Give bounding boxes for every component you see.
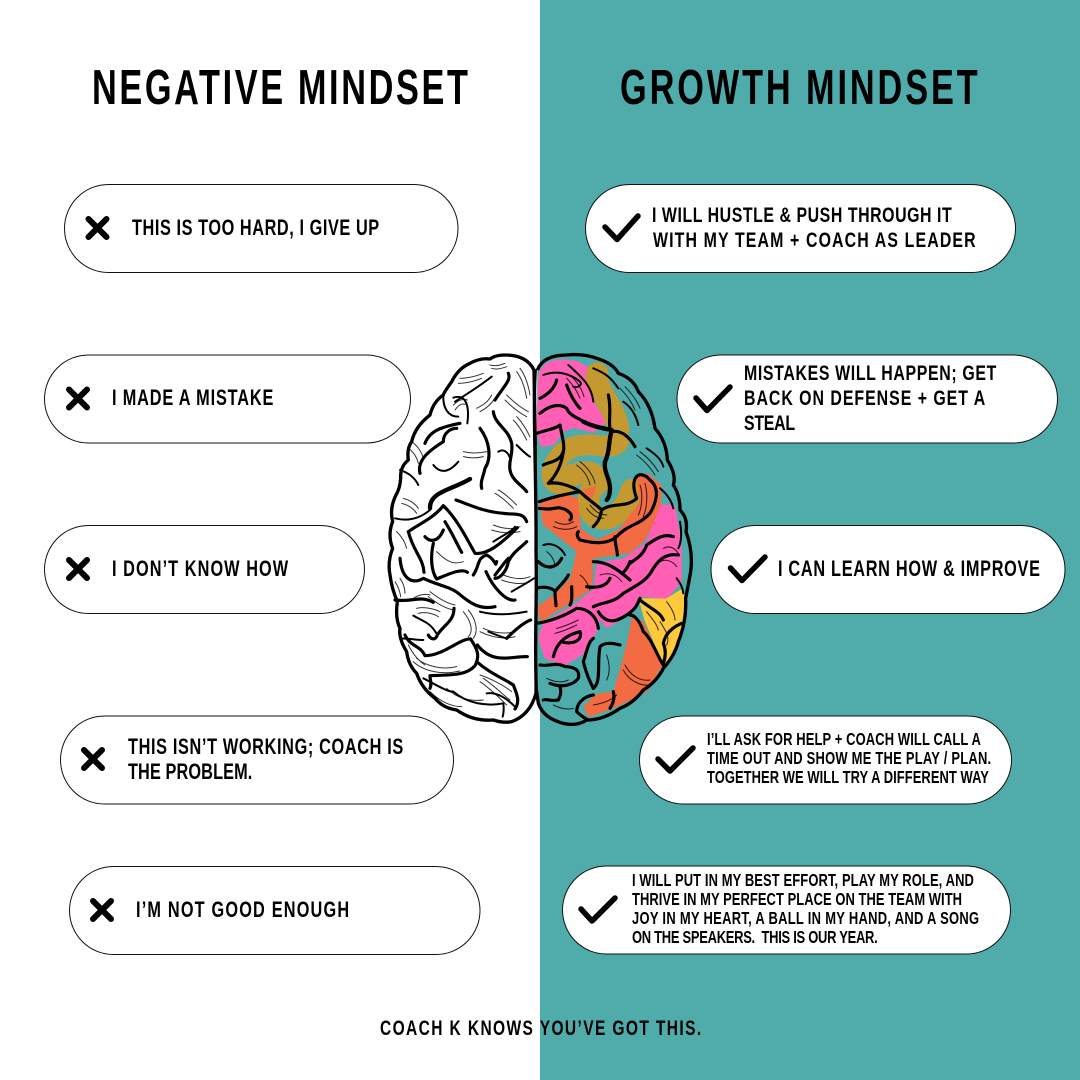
text: growth 4: I’LL ASK FOR HELP + COACH WILL CALL A xyxy=(707,730,981,750)
text: growth 4: TIME OUT AND SHOW ME THE PLAY / PLAN. xyxy=(707,749,991,769)
text: growth 2: STEAL xyxy=(744,412,795,436)
icon: x mark xyxy=(84,750,102,768)
brain illustration xyxy=(389,355,691,724)
icon: check mark xyxy=(696,387,730,410)
text: growth 3: I CAN LEARN HOW & IMPROVE xyxy=(778,557,1040,582)
left hemisphere, white xyxy=(389,355,537,722)
text: negative 4 xyxy=(128,735,403,785)
text: growth 5: THRIVE IN MY PERFECT PLACE ON THE TEAM WITH xyxy=(632,890,962,910)
icon: x mark xyxy=(88,219,106,237)
icon: check mark xyxy=(581,898,615,921)
text: growth 5: ON THE SPEAKERS. THIS IS OUR YEAR. xyxy=(632,928,878,948)
panel: growth 1 xyxy=(586,184,1016,272)
colour patch: gold swirl xyxy=(552,373,632,519)
text: growth 1 xyxy=(652,204,976,253)
colour patch: orange bottom xyxy=(587,620,659,714)
right hemisphere, coloured xyxy=(537,355,691,724)
colour patch: pink top xyxy=(539,362,603,444)
right hemisphere fine hatching xyxy=(547,377,678,709)
text: growth 5: I WILL PUT IN MY BEST EFFORT, PLAY MY ROLE, AND xyxy=(632,871,974,891)
text: growth 5 xyxy=(632,871,979,948)
panel: negative 1 xyxy=(64,184,458,272)
text: growth 2 xyxy=(744,362,997,436)
text: growth 4 xyxy=(707,730,991,788)
colour patch: orange centre xyxy=(539,476,659,618)
panel: growth mindset teal background xyxy=(540,0,1080,1080)
title: growth mindset: GROWTH MINDSET xyxy=(620,60,978,114)
text: growth 1: WITH MY TEAM + COACH AS LEADER xyxy=(653,229,976,253)
panel: negative 2 xyxy=(44,355,410,443)
text: negative 4: THIS ISN’T WORKING; COACH IS xyxy=(128,735,403,760)
central fissure xyxy=(534,369,537,698)
panel: growth 5 xyxy=(562,866,1010,954)
colour patch: yellow xyxy=(642,592,683,662)
panel: negative 5 xyxy=(70,866,480,954)
icon: x mark xyxy=(69,390,87,408)
colour patch: pink right xyxy=(541,507,679,663)
icon: x mark xyxy=(93,901,111,919)
text: negative 2: I MADE A MISTAKE xyxy=(112,386,273,411)
left hemisphere folds xyxy=(395,363,534,717)
panel: growth 3 xyxy=(711,526,1065,614)
text: negative 5: I’M NOT GOOD ENOUGH xyxy=(136,898,349,923)
panel: growth 4 xyxy=(640,716,1012,804)
panel: growth 2 xyxy=(677,355,1058,443)
text: growth 5: JOY IN MY HEART, A BALL IN MY HAND, AND A SONG xyxy=(632,909,979,929)
left hemisphere fine hatching xyxy=(395,363,530,707)
icon: check mark xyxy=(730,557,765,580)
text: growth 1: I WILL HUSTLE & PUSH THROUGH IT xyxy=(652,204,952,228)
text: negative 3: I DON’T KNOW HOW xyxy=(112,557,289,582)
icon: check mark xyxy=(605,216,638,240)
icon: x mark xyxy=(69,560,87,578)
title: negative mindset: NEGATIVE MINDSET xyxy=(92,60,468,114)
right hemisphere outline xyxy=(537,355,691,724)
footer message: COACH K KNOWS YOU’VE GOT THIS. xyxy=(380,1016,701,1040)
icon: check mark xyxy=(658,748,693,771)
panel: negative 3 xyxy=(44,526,364,614)
right hemisphere folds xyxy=(537,365,683,720)
panel: negative 4 xyxy=(60,716,454,804)
text: growth 2: BACK ON DEFENSE + GET A xyxy=(744,387,986,411)
text: growth 4: TOGETHER WE WILL TRY A DIFFERENT WAY xyxy=(707,768,989,788)
text: growth 2: MISTAKES WILL HAPPEN; GET xyxy=(744,362,997,386)
text: negative 1: THIS IS TOO HARD, I GIVE UP xyxy=(132,216,379,241)
text: negative 4: THE PROBLEM. xyxy=(128,760,252,785)
